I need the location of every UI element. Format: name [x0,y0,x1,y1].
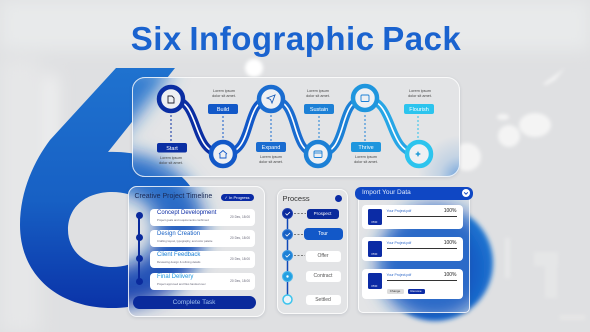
panel: process [277,189,348,314]
file row 2: Your Project.pdf [386,240,411,244]
node: start [158,86,182,110]
step: contract [306,270,340,282]
row: design creation: Crafting layout, typography, and color palette [157,239,212,243]
row: final delivery [150,272,255,290]
node: thrive [352,86,376,110]
wave connector [170,98,418,154]
step: prospect: Prospect [314,210,331,216]
status badge [220,194,254,200]
file row 3: PDF [372,284,378,288]
captions: dolor sit amet. [259,160,282,164]
node: sustain [306,142,330,166]
process heading: Process [282,194,310,202]
captions: Lorem ipsum [213,88,234,92]
import header bar: Import Your Data [362,189,411,196]
step: tour [304,228,342,240]
change button [386,288,404,294]
step: settled [306,294,340,305]
frosted glass panel fills [128,77,470,316]
row: design creation: 20 Dec, 18:00 [230,236,250,240]
import header bar [355,187,473,200]
step: offer: Offer [317,252,329,258]
row: final delivery: Final Delivery [157,274,193,280]
step labels: Flourish [409,106,428,112]
captions: Lorem ipsum [409,88,430,92]
row: client feedback: 20 Dec, 18:00 [230,256,250,260]
row: final delivery: 20 Dec, 18:00 [230,278,250,282]
row: concept development: Concept Development [157,210,216,216]
step labels: Thrive [358,144,373,150]
captions: dolor sit amet. [306,94,329,98]
captions: Lorem ipsum [355,154,376,158]
row: final delivery: Project approved and files handed over [157,282,206,286]
file row 3 [362,268,462,298]
menu badge [335,195,342,202]
step: offer [306,250,340,262]
row: concept development [150,208,255,226]
step: contract: Contract [314,272,332,278]
file row 3: Your Project.pdf [386,272,411,276]
node: flourish [406,142,430,166]
complete task button [132,296,256,308]
row: client feedback [150,250,255,268]
node: build [210,142,234,166]
captions [159,88,431,164]
file row 2 [362,236,462,260]
file row 1 [362,204,462,228]
vertical track [288,214,306,299]
step labels: Expand [261,144,280,150]
step dots [282,208,292,304]
captions: dolor sit amet. [408,94,431,98]
step labels: Sustain [309,106,328,112]
row: client feedback: Client Feedback [157,252,200,258]
captions: Lorem ipsum [260,154,281,158]
row: concept development: 20 Dec, 18:00 [230,214,250,218]
step labels [156,104,434,152]
captions: Lorem ipsum [307,88,328,92]
remove button: Remove [410,288,422,292]
timeline heading: Creative Project Timeline [134,193,212,200]
file row 1: 100% [444,208,456,214]
captions: dolor sit amet. [354,160,377,164]
status badge: ✓ In Progress [225,194,249,200]
captions: dolor sit amet. [212,94,235,98]
panel: import data [358,192,470,313]
remove button [408,288,424,294]
file row 1: PDF [372,220,378,224]
step: settled: Settled [315,296,331,302]
step: prospect [306,208,338,218]
row: client feedback: Reviewing design & refining details [157,260,200,264]
row: concept development: Project goals and requirements confirmed [157,218,209,222]
step: tour: Tour [318,230,328,236]
panel: project timeline [128,186,264,317]
step labels: Start [166,146,178,152]
file row 3: 100% [444,272,456,278]
row: design creation [150,230,255,246]
complete task button: Complete Task [173,298,215,306]
file row 1: Your Project.pdf [386,208,411,212]
step labels: Build [216,106,229,112]
change button: Change [390,288,400,292]
timeline dots [136,212,143,285]
captions: dolor sit amet. [159,160,182,164]
captions: Lorem ipsum [160,156,181,160]
node: expand [258,86,282,110]
file row 2: PDF [372,252,378,256]
dashed stems [170,114,418,140]
panel: wave process [132,77,460,177]
timeline line [138,215,140,281]
title: Six Infographic Pack [131,20,461,57]
file row 2: 100% [444,240,456,246]
row: design creation: Design Creation [157,231,200,237]
